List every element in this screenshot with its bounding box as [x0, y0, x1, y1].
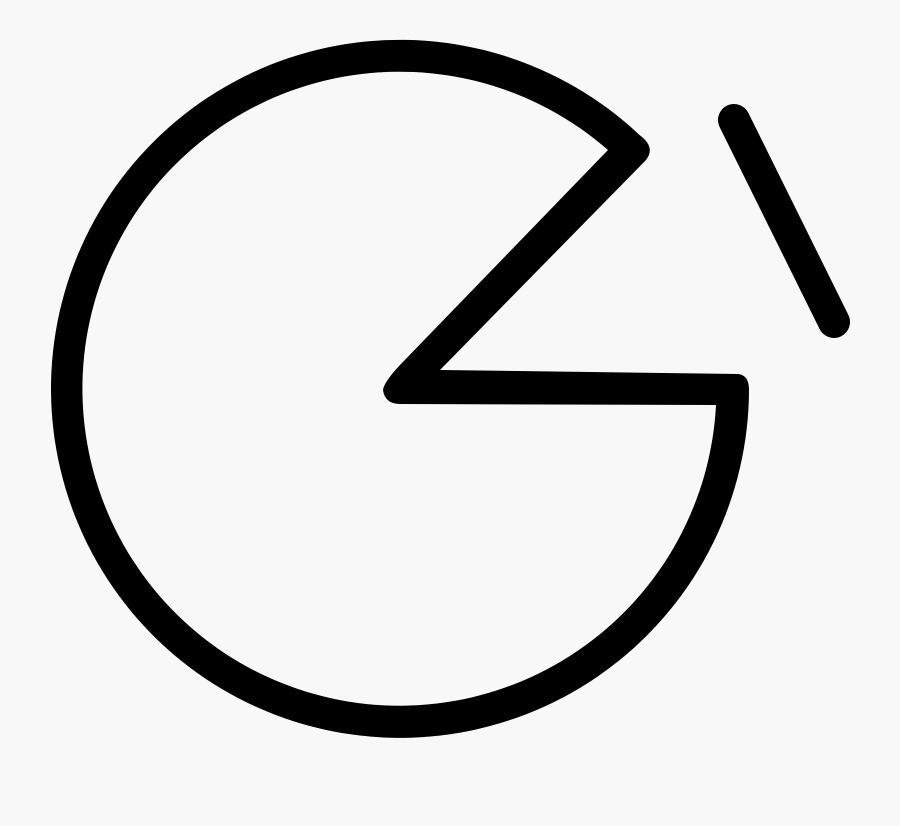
pie chart outline with cut-out wedge: [51, 40, 749, 738]
detached slice arc stroke: [734, 120, 834, 322]
